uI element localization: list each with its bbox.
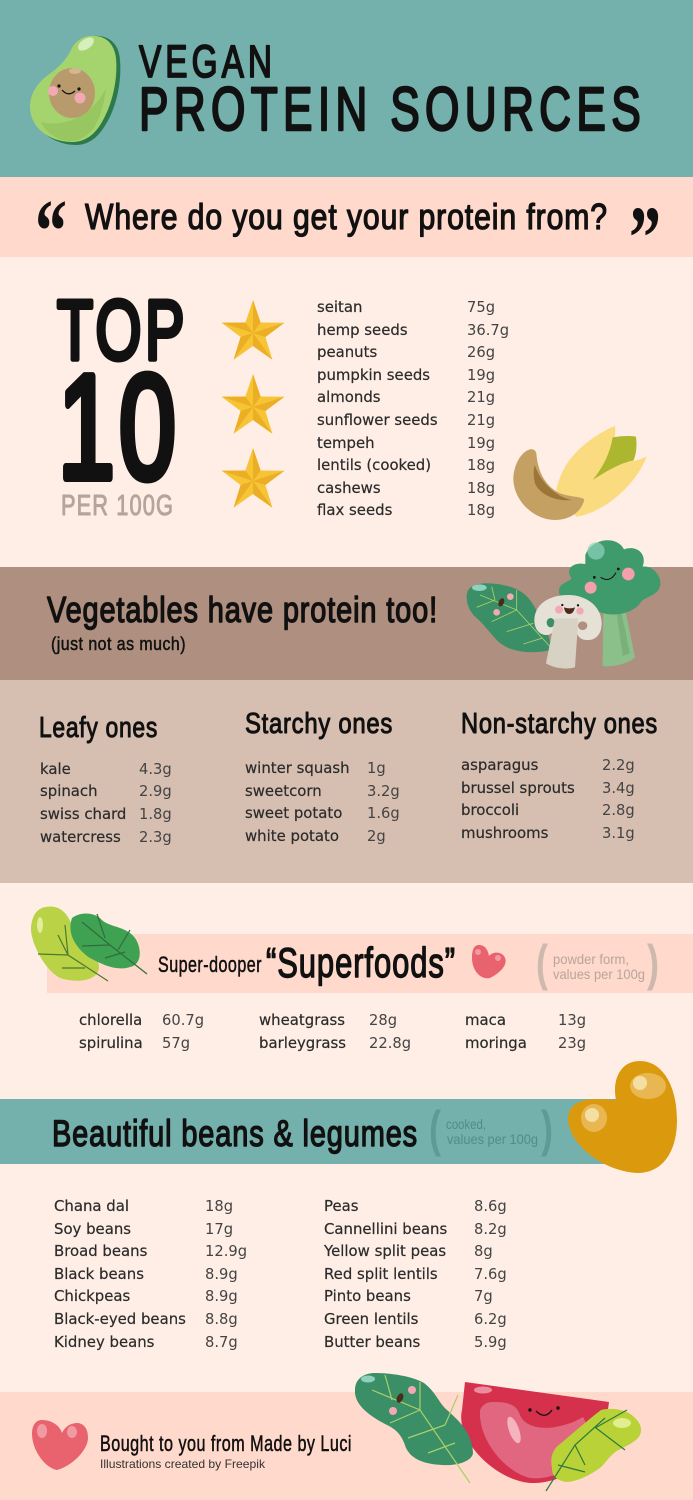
list: top 10 proteins: 19g <box>467 435 495 452</box>
icon: footer watermelon <box>461 1382 609 1483</box>
banner: question: “ <box>35 182 67 281</box>
heading: top 10 per 100g <box>57 283 188 522</box>
credit text <box>100 1431 352 1471</box>
icon: heart <box>472 945 506 978</box>
list: top 10 proteins: 21g <box>467 412 495 429</box>
list: superfoods: maca <box>465 1011 506 1029</box>
column: leafy ones: 1.8g <box>139 806 172 823</box>
list: beans column two: 6.2g <box>474 1311 507 1328</box>
column: non-starchy ones: 3.4g <box>602 780 635 797</box>
heading: top 10 per 100g: PER 100G <box>61 490 174 522</box>
banner: superfoods <box>47 934 693 993</box>
title <box>139 36 646 143</box>
credit text: Illustrations created by Freepik <box>100 1457 266 1471</box>
panel: vegetable lists <box>0 680 693 883</box>
column: leafy ones <box>39 712 172 846</box>
column: leafy ones: Leafy ones <box>39 712 158 744</box>
list: beans column two: Red split lentils <box>324 1265 438 1283</box>
list: top 10 proteins: tempeh <box>317 434 375 452</box>
note: cooked <box>429 1101 553 1157</box>
list: beans column two: Yellow split peas <box>323 1242 446 1260</box>
list: superfoods: 60.7g <box>162 1012 204 1029</box>
list: beans column one: Broad beans <box>54 1242 148 1260</box>
note: powder form: powder form, <box>553 951 629 967</box>
banner: beans and legumes: Beautiful beans & legumes <box>52 1113 418 1154</box>
list: top 10 proteins: 21g <box>467 389 495 406</box>
list: beans column two: Green lentils <box>324 1310 419 1328</box>
note: powder form: ( <box>536 935 548 991</box>
icon: three stars <box>222 300 284 508</box>
list: beans column one: 8.9g <box>205 1288 238 1305</box>
list: superfoods: spirulina <box>79 1034 143 1052</box>
list: beans column one: 8.7g <box>205 1334 238 1351</box>
list: superfoods <box>79 1011 586 1052</box>
icon: footer green leaf <box>355 1373 473 1483</box>
note: powder form: values per 100g <box>553 966 645 982</box>
list: superfoods: 22.8g <box>369 1035 411 1052</box>
list: superfoods: wheatgrass <box>259 1011 345 1029</box>
list: superfoods: 23g <box>558 1035 586 1052</box>
banner: question <box>0 177 693 288</box>
column: starchy ones: 1g <box>367 760 386 777</box>
list: top 10 proteins: 26g <box>467 344 495 361</box>
column: starchy ones: white potato <box>245 827 339 845</box>
list: beans column one <box>54 1197 247 1351</box>
list: beans column one: 17g <box>205 1221 233 1238</box>
list: beans column one: Black beans <box>54 1265 144 1283</box>
column: starchy ones: Starchy ones <box>245 708 393 740</box>
banner: superfoods: Super-dooper <box>158 952 262 977</box>
column: leafy ones: kale <box>40 760 71 778</box>
list: top 10 proteins: cashews <box>317 479 381 497</box>
icon: footer lime leaf <box>546 1409 641 1491</box>
column: starchy ones: 3.2g <box>367 783 400 800</box>
note: cooked: ) <box>541 1101 553 1157</box>
list: top 10 proteins: peanuts <box>317 343 377 361</box>
icon: spinach leaves <box>31 907 147 981</box>
column: starchy ones: sweet potato <box>245 804 342 822</box>
column: starchy ones <box>245 708 400 845</box>
list: beans column one: Chana dal <box>54 1197 129 1215</box>
list: beans column two: 8.6g <box>474 1198 507 1215</box>
list: beans column one: Chickpeas <box>54 1287 131 1305</box>
list: top 10 proteins: pumpkin seeds <box>317 366 430 384</box>
column: non-starchy ones: mushrooms <box>461 824 549 842</box>
illustration: leaf <box>467 583 552 652</box>
list: beans column two: Peas <box>324 1197 359 1215</box>
list: beans column two: 8g <box>474 1243 493 1260</box>
list: top 10 proteins: seitan <box>317 298 362 316</box>
heading: top 10 per 100g: TOP <box>57 283 188 377</box>
note: cooked: values per 100g <box>447 1131 538 1147</box>
list: superfoods: moringa <box>465 1034 527 1052</box>
list: beans column one: 8.8g <box>205 1311 238 1328</box>
heading: top 10 per 100g: 10 <box>58 345 180 510</box>
list: beans column two: Cannellini beans <box>324 1220 447 1238</box>
list: beans column two <box>323 1197 507 1351</box>
column: non-starchy ones: 3.1g <box>602 825 635 842</box>
column: non-starchy ones: asparagus <box>461 756 539 774</box>
header panel <box>0 0 693 177</box>
list: beans column two: Butter beans <box>324 1333 421 1351</box>
list: beans column one: Black-eyed beans <box>54 1310 186 1328</box>
list: top 10 proteins: 18g <box>467 502 495 519</box>
note: powder form <box>536 935 659 991</box>
list: top 10 proteins <box>317 298 509 519</box>
credit text: Bought to you from Made by Luci <box>100 1431 352 1456</box>
column: leafy ones: swiss chard <box>40 805 126 823</box>
footer panel <box>0 1392 693 1500</box>
list: beans column one: 8.9g <box>205 1266 238 1283</box>
list: superfoods: barleygrass <box>259 1034 346 1052</box>
icon: avocado <box>30 35 120 145</box>
icon: pistachio <box>513 426 647 520</box>
list: top 10 proteins: 36.7g <box>467 322 509 339</box>
column: non-starchy ones: 2.8g <box>602 802 635 819</box>
banner: vegetables: (just not as much) <box>51 634 186 654</box>
note: powder form: ) <box>647 935 659 991</box>
column: non-starchy ones: brussel sprouts <box>461 779 575 797</box>
list: beans column one: Kidney beans <box>54 1333 155 1351</box>
column: leafy ones: spinach <box>40 782 98 800</box>
banner: superfoods: “Superfoods” <box>266 939 456 986</box>
column: leafy ones: 2.9g <box>139 783 172 800</box>
list: top 10 proteins: 18g <box>467 457 495 474</box>
list: superfoods: 28g <box>369 1012 397 1029</box>
list: beans column one: 18g <box>205 1198 233 1215</box>
list: superfoods: 57g <box>162 1035 190 1052</box>
list: beans column two: 5.9g <box>474 1334 507 1351</box>
banner: beans and legumes <box>0 1099 620 1164</box>
column: starchy ones: sweetcorn <box>245 782 322 800</box>
banner: vegetables <box>0 567 693 680</box>
list: beans column two: 7g <box>474 1288 493 1305</box>
column: leafy ones: 4.3g <box>139 761 172 778</box>
list: top 10 proteins: 18g <box>467 480 495 497</box>
icon: leaf, mushroom and broccoli <box>467 540 660 669</box>
list: superfoods: chlorella <box>79 1011 142 1029</box>
column: starchy ones: winter squash <box>245 759 350 777</box>
column: non-starchy ones <box>461 708 658 842</box>
illustration: broccoli <box>559 540 660 666</box>
list: top 10 proteins: 75g <box>467 299 495 316</box>
list: beans column two: Pinto beans <box>324 1287 411 1305</box>
list: beans column one: 12.9g <box>205 1243 247 1260</box>
column: leafy ones: 2.3g <box>139 829 172 846</box>
column: non-starchy ones: 2.2g <box>602 757 635 774</box>
list: top 10 proteins: lentils (cooked) <box>317 456 431 474</box>
note: cooked: cooked, <box>446 1116 486 1132</box>
column: starchy ones: 2g <box>367 828 386 845</box>
column: non-starchy ones: broccoli <box>461 801 519 819</box>
title: VEGAN <box>139 36 276 87</box>
column: leafy ones: watercress <box>40 828 121 846</box>
list: top 10 proteins: flax seeds <box>317 501 393 519</box>
list: top 10 proteins: hemp seeds <box>317 321 408 339</box>
note: cooked: ( <box>429 1101 441 1157</box>
banner: question: Where do you get your protein from? <box>85 196 608 237</box>
banner: question: ” <box>629 189 661 288</box>
list: beans column two: 8.2g <box>474 1221 507 1238</box>
list: beans column one: Soy beans <box>54 1220 131 1238</box>
list: superfoods: 13g <box>558 1012 586 1029</box>
icon: bean <box>568 1061 677 1173</box>
column: starchy ones: 1.6g <box>367 805 400 822</box>
list: top 10 proteins: sunflower seeds <box>317 411 438 429</box>
banner: vegetables: Vegetables have protein too! <box>47 589 438 630</box>
list: top 10 proteins: almonds <box>317 388 381 406</box>
list: top 10 proteins: 19g <box>467 367 495 384</box>
list: beans column two: 7.6g <box>474 1266 507 1283</box>
illustration: mushroom <box>534 595 602 669</box>
icon: footer heart <box>32 1420 88 1470</box>
